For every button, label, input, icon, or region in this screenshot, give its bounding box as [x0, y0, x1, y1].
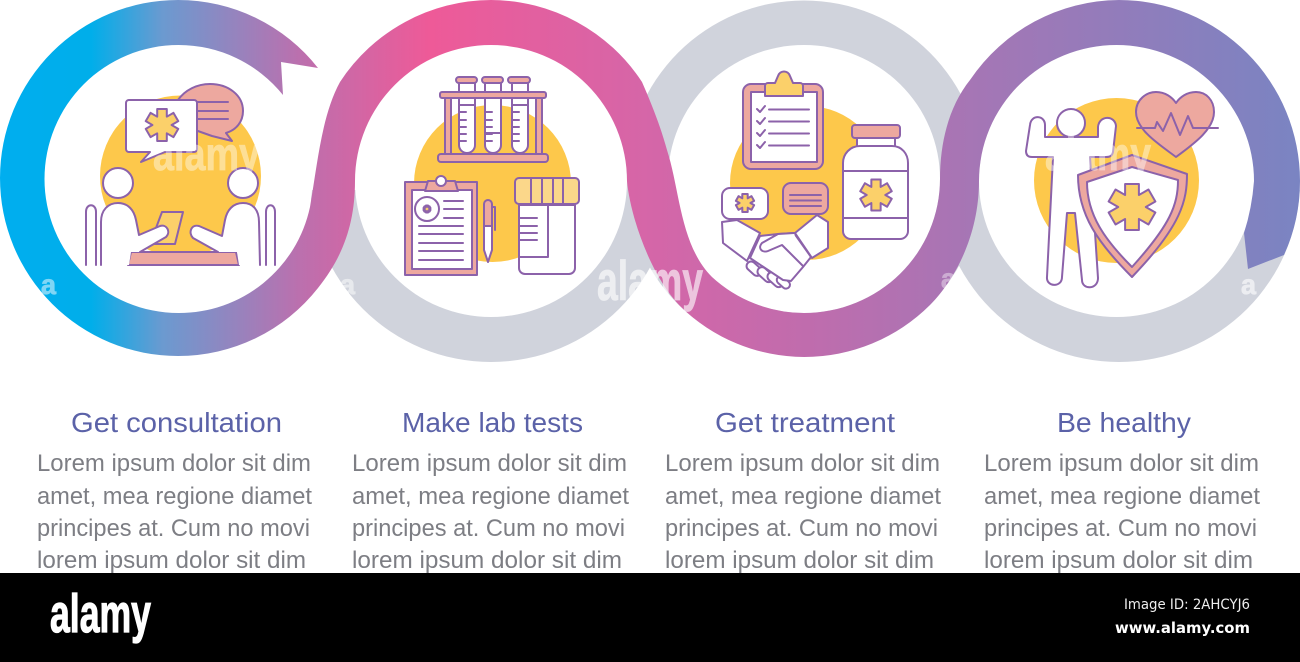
icon: table — [128, 252, 239, 265]
watermarks: alamy — [597, 249, 703, 312]
watermarks: alamy — [153, 128, 260, 180]
watermarks: a — [41, 269, 56, 300]
icon: medicine bottle — [843, 125, 908, 239]
yellow disc — [100, 96, 261, 256]
watermarks: a — [1241, 269, 1256, 300]
body: step 3: lorem ipsum dolor sit dim — [665, 547, 934, 574]
icon: medical clipboard — [405, 176, 477, 275]
body: step 1: Lorem ipsum dolor sit dim — [37, 450, 311, 477]
step 4 icon: healthy — [1026, 92, 1218, 287]
body: step 3: amet, mea regione diamet — [665, 483, 941, 510]
icon: pink speech bubble — [178, 84, 243, 141]
yellow disc — [1034, 98, 1199, 263]
body: step 4: amet, mea regione diamet — [984, 483, 1260, 510]
icon: left person — [86, 168, 168, 265]
gradient ribbon arrow — [0, 0, 1300, 357]
footer logo: alamy — [50, 584, 151, 644]
image id: Image ID: 2AHCYJ6 — [1124, 597, 1250, 613]
body: step 2: principes at. Cum no movi — [352, 515, 625, 542]
body: step 4 — [984, 450, 1260, 574]
icon: handshake — [722, 215, 828, 290]
step 3 text — [665, 407, 941, 574]
site url: www.alamy.com — [1115, 619, 1250, 637]
icon: document on table — [150, 212, 183, 244]
icon: test tube rack — [438, 77, 548, 162]
yellow disc — [730, 106, 884, 260]
icon: specimen jar — [515, 178, 579, 274]
body: step 1 — [37, 450, 312, 574]
body: step 1: principes at. Cum no movi — [37, 515, 310, 542]
icon: shield with medical star — [1078, 155, 1187, 277]
watermarks — [41, 128, 1256, 312]
step 4 text — [984, 407, 1260, 574]
body: step 2: amet, mea regione diamet — [352, 483, 629, 510]
step 3 icon: treatment — [722, 72, 908, 290]
body: step 2 — [352, 450, 629, 574]
icon: pen — [484, 200, 495, 262]
step 1 text — [37, 407, 312, 574]
yellow disc — [414, 105, 571, 262]
body: step 1: lorem ipsum dolor sit dim — [37, 547, 306, 574]
icon: checklist clipboard — [743, 72, 823, 169]
body: step 4: lorem ipsum dolor sit dim — [984, 547, 1253, 574]
body: step 3: Lorem ipsum dolor sit dim — [665, 450, 940, 477]
gray rings behind ribbon — [310, 0, 1300, 362]
icon: right person — [191, 168, 275, 265]
step 2 text — [352, 407, 629, 574]
icon: white bubble — [722, 188, 768, 219]
footer bar — [0, 573, 1300, 662]
step 2 icon: lab tests — [405, 77, 579, 275]
body: step 2: Lorem ipsum dolor sit dim — [352, 450, 627, 477]
icon: strong person — [1026, 109, 1116, 287]
watermarks: a — [941, 263, 956, 294]
body: step 1: amet, mea regione diamet — [37, 483, 312, 510]
body: step 3: principes at. Cum no movi — [665, 515, 938, 542]
watermarks: alamy — [1045, 128, 1151, 180]
icon: white speech bubble with medical star — [126, 100, 197, 162]
body: step 4: principes at. Cum no movi — [984, 515, 1257, 542]
watermarks: a — [340, 269, 355, 300]
step 1 icon: consultation — [86, 84, 275, 265]
white step circles — [44, 45, 1254, 317]
icon: heart with pulse — [1136, 92, 1218, 157]
body: step 4: Lorem ipsum dolor sit dim — [984, 450, 1259, 477]
icon: pink bubble — [783, 183, 828, 214]
body: step 3 — [665, 450, 941, 574]
heading: be healthy: Be healthy — [1057, 407, 1191, 438]
heading: get consultation: Get consultation — [71, 407, 282, 438]
body: step 2: lorem ipsum dolor sit dim — [352, 547, 622, 574]
heading: get treatment: Get treatment — [715, 407, 895, 438]
heading: make lab tests: Make lab tests — [402, 407, 583, 438]
